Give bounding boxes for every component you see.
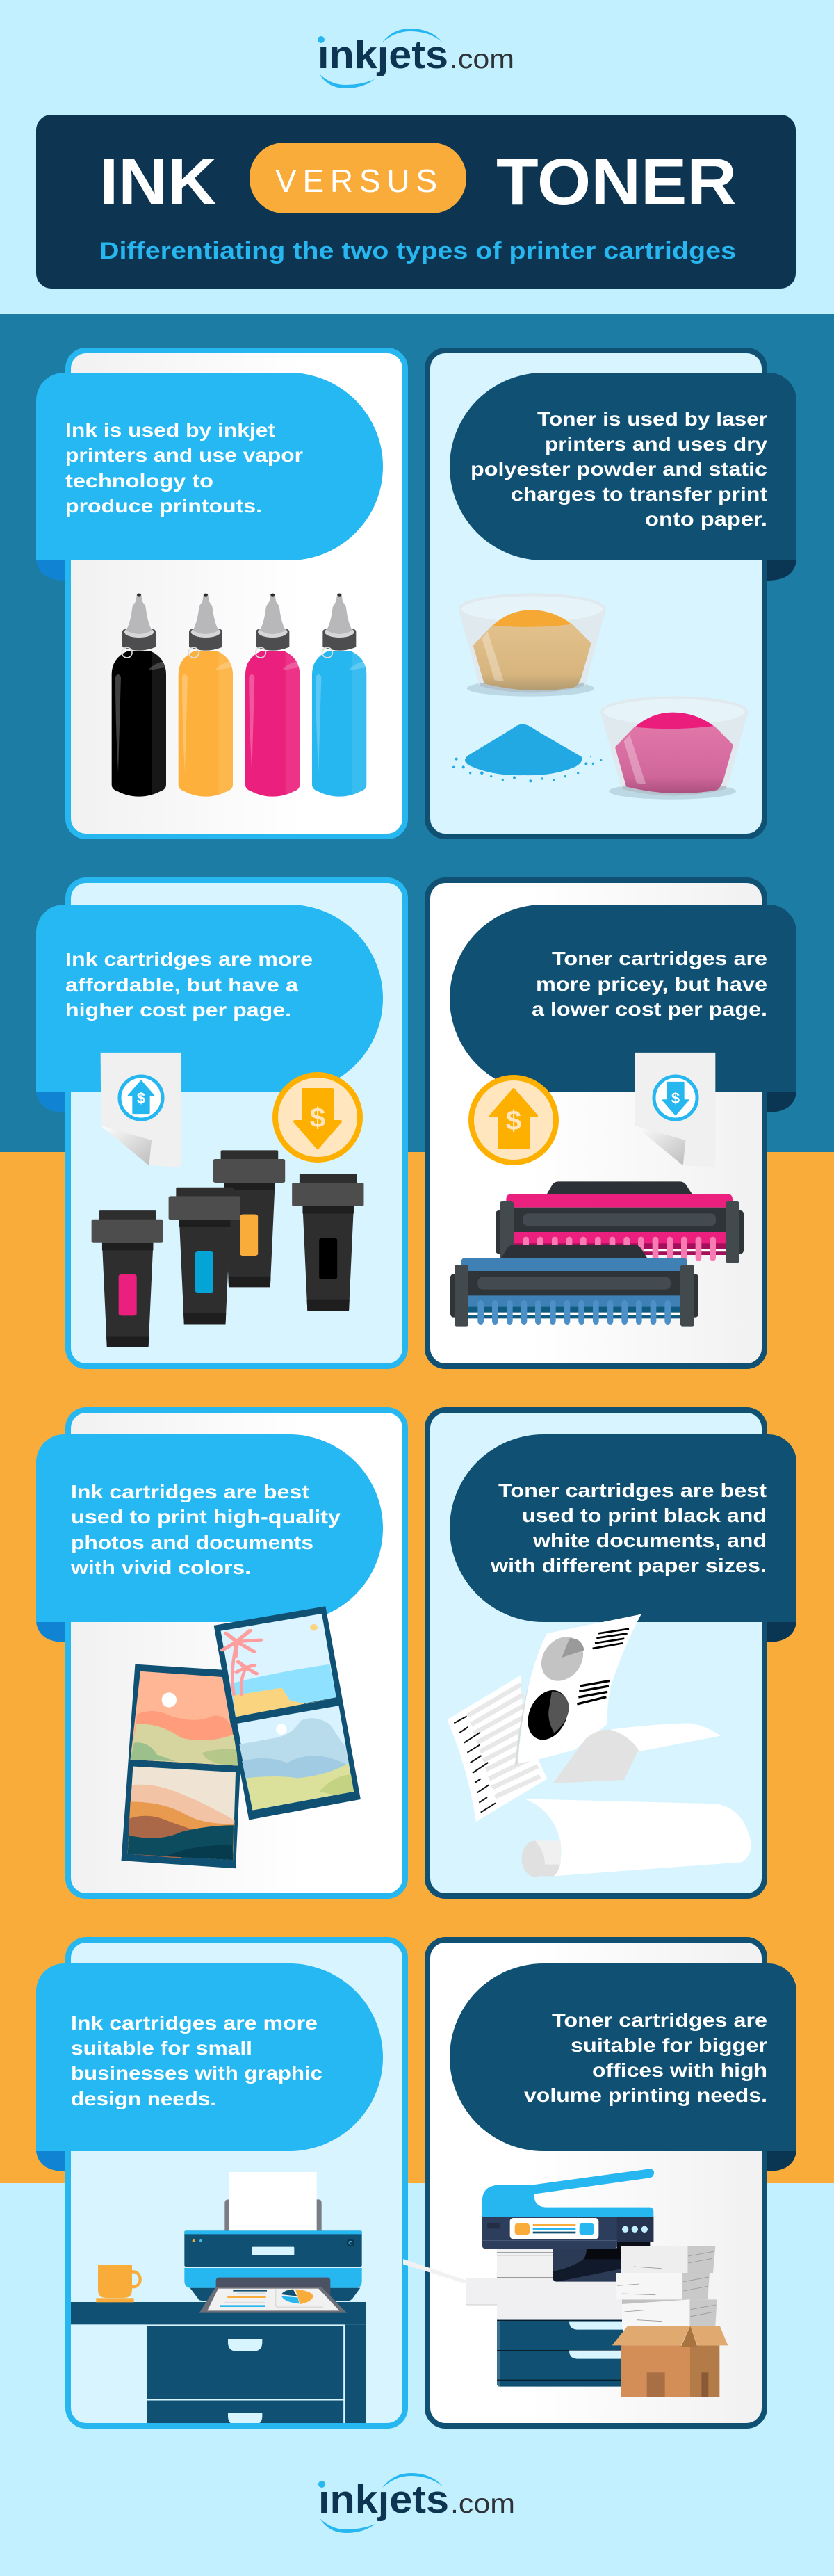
callout: toner users (450, 1963, 796, 2151)
heading: TONER: TONER (496, 145, 737, 219)
logo: inkjets.com bottom: .com (450, 2489, 515, 2519)
callout: ink technology: printers and use vapor (65, 444, 303, 466)
icon: coin with down arrow: $ (310, 1103, 325, 1133)
callout: ink price: affordable, but have a (65, 974, 298, 996)
callout: toner users: offices with high (592, 2059, 767, 2081)
callout: ink users: suitable for small (71, 2037, 252, 2059)
callout: ink best use: with vivid colors. (70, 1557, 251, 1578)
callout: ink users: Ink cartridges are more (71, 2012, 318, 2034)
striped text sheet (447, 1675, 547, 1822)
callout: toner technology (450, 373, 796, 560)
callout: ink users: design needs. (71, 2088, 216, 2109)
paper roll (522, 1799, 751, 1877)
icon: coin with up arrow: $ (506, 1105, 521, 1136)
callout: ink price (36, 905, 383, 1092)
panel: ink price (36, 880, 405, 1366)
curled sheet (553, 1723, 721, 1783)
panel: toner users (403, 1940, 796, 2426)
callout: ink best use: used to print high-quality (71, 1506, 341, 1528)
title banner (36, 115, 796, 289)
panel: toner price (427, 880, 796, 1366)
callout: toner technology: charges to transfer print (511, 483, 767, 505)
callout: ink users: businesses with graphic (71, 2062, 322, 2084)
icon: cups and toner powder (452, 594, 748, 800)
icon: curled paper with price down: $ (671, 1089, 680, 1107)
pie chart sheet (515, 1614, 641, 1766)
callout: ink best use: photos and documents (71, 1532, 313, 1553)
callout: ink price: Ink cartridges are more (65, 948, 313, 970)
icon: four ink bottles (112, 594, 366, 797)
panel: ink users (36, 1940, 405, 2426)
icon: curled paper with price up (101, 1053, 181, 1167)
icon: blue powder pile (452, 724, 602, 782)
callout: toner best use: used to print black and (522, 1505, 767, 1526)
callout: ink best use: Ink cartridges are best (71, 1481, 309, 1502)
icon: laser toner cartridges (450, 1181, 744, 1327)
panel: toner technology (427, 350, 796, 836)
callout: toner price: Toner cartridges are (552, 948, 767, 969)
panel: toner best use (427, 1410, 796, 1896)
icon: ink cartridges (92, 1150, 363, 1347)
callout: ink technology: technology to (65, 470, 213, 492)
icon: inkjet printer (184, 2172, 362, 2313)
left photo strip (121, 1664, 240, 1868)
callout: toner price: a lower cost per page. (532, 998, 767, 1020)
callout: ink price: higher cost per page. (65, 999, 291, 1021)
panel: ink best use (36, 1410, 405, 1896)
icon: coin with down arrow (275, 1075, 360, 1160)
icon: coin with up arrow (471, 1078, 556, 1163)
callout: toner technology: onto paper. (645, 508, 767, 530)
callout: toner price (450, 905, 796, 1092)
right photo strip (214, 1606, 361, 1820)
callout: toner price: more pricey, but have (536, 973, 767, 995)
callout: toner best use: with different paper sizes. (490, 1555, 767, 1576)
callout: ink users (36, 1963, 383, 2151)
versus pill (250, 143, 466, 213)
heading: INK: INK (99, 145, 217, 219)
callout: ink technology: produce printouts. (65, 495, 262, 517)
logo: inkjets.com bottom: inkjets (318, 2477, 449, 2522)
icon: desk with inkjet printer (71, 2172, 366, 2423)
subtitle: Differentiating the two types of printer cartridges (99, 238, 736, 264)
callout: toner best use: white documents, and (532, 1530, 767, 1551)
icon: mug (96, 2265, 140, 2302)
callout: ink technology: Ink is used by inkjet (65, 419, 275, 441)
logo: inkjets.com top: inkjets (318, 33, 448, 77)
desk (71, 2302, 366, 2423)
icon: photo prints (121, 1606, 361, 1868)
callout: toner technology: Toner is used by laser (537, 408, 767, 430)
icon: magenta toner cup (600, 697, 748, 800)
logo: inkjets.com top (316, 29, 514, 88)
icon: orange toner cup (459, 594, 606, 697)
callout: ink technology (36, 373, 383, 560)
icon: black and white documents (447, 1614, 751, 1877)
callout: toner technology: polyester powder and static (471, 458, 767, 480)
icon: curled paper with price up: $ (137, 1089, 145, 1107)
icon: curled paper with price down (635, 1053, 715, 1167)
callout: toner users: suitable for bigger (571, 2034, 767, 2056)
callout: ink best use (36, 1434, 383, 1622)
icon: paper stacks (616, 2246, 717, 2326)
versus pill: VERSUS (275, 163, 437, 199)
icon: cardboard box (612, 2326, 728, 2397)
callout: toner users: Toner cartridges are (552, 2009, 767, 2031)
callout: toner users: volume printing needs. (524, 2084, 767, 2106)
callout: toner technology: printers and uses dry (545, 433, 767, 455)
icon: copier (403, 2169, 654, 2387)
icon: office copier with paper stacks (403, 2169, 728, 2397)
callout: toner best use (450, 1434, 796, 1622)
panel: ink technology (36, 350, 405, 836)
callout: toner best use: Toner cartridges are best (498, 1480, 767, 1501)
logo: inkjets.com bottom (317, 2473, 515, 2533)
logo: inkjets.com top: .com (450, 44, 514, 74)
